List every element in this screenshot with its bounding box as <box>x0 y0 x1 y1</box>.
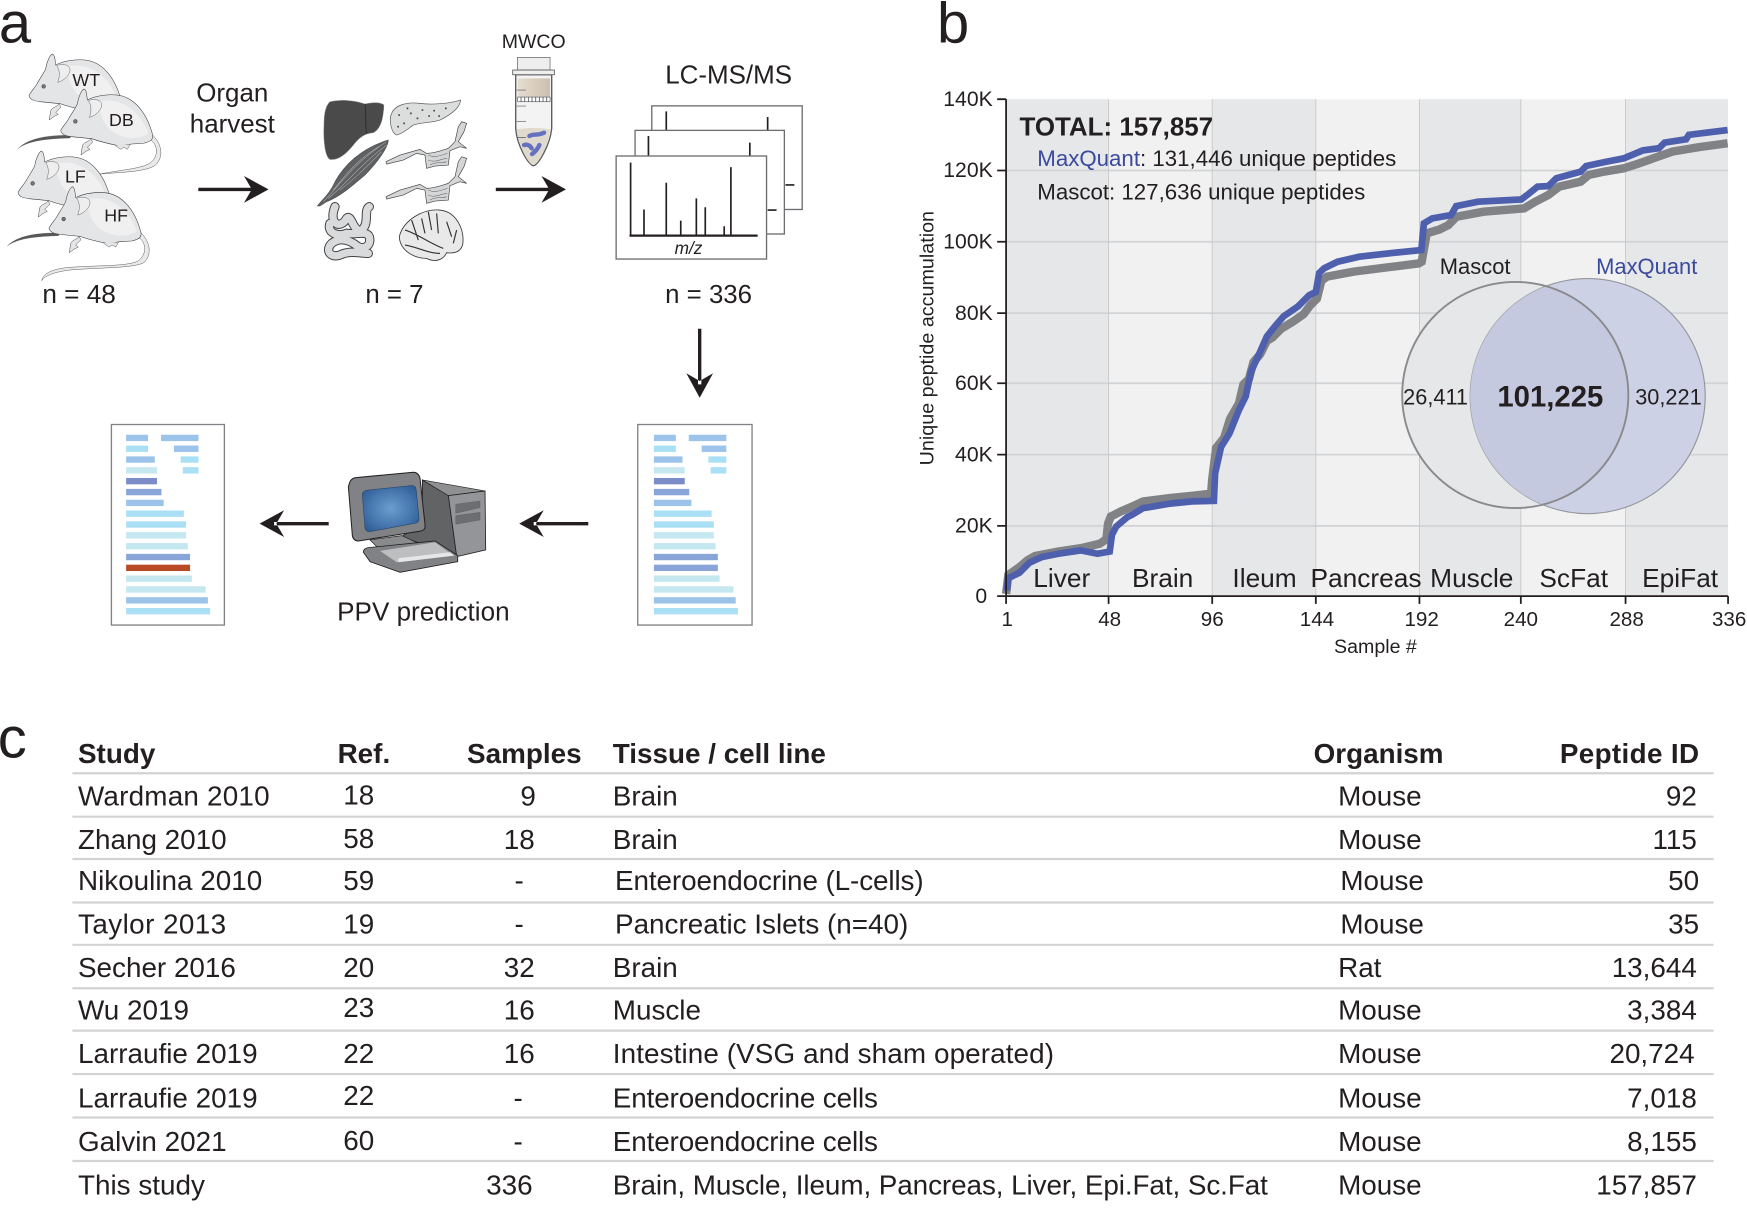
row: This study: 336 <box>486 1169 533 1200</box>
y-axis tick labels: 0 <box>975 585 987 608</box>
tissue labels: Ileum <box>1232 563 1297 593</box>
row: Taylor 2013: 35 <box>1668 909 1699 940</box>
icon: WT mouse <box>29 54 121 120</box>
icons: organs <box>317 100 467 260</box>
row: Wardman 2010 <box>78 779 1697 812</box>
venn diagram: MaxQuant <box>1596 254 1697 279</box>
icon: WT mouse: WT <box>72 70 100 90</box>
tissue labels: EpiFat <box>1642 563 1719 593</box>
row: Galvin 2021: Mouse <box>1338 1126 1422 1157</box>
row: Zhang 2010: Zhang 2010 <box>78 824 227 855</box>
row: Larraufie 2019 intestine: 20,724 <box>1609 1038 1695 1069</box>
tissue background bands <box>1006 99 1728 596</box>
text: Organ harvest: harvest <box>190 111 276 139</box>
row: Secher 2016: Secher 2016 <box>78 952 236 983</box>
row: Secher 2016: Rat <box>1338 952 1382 983</box>
x-axis title: Sample # <box>1334 636 1417 658</box>
panel b: cumulative peptide chart <box>917 88 1746 658</box>
row: Zhang 2010 <box>78 823 1697 855</box>
table rules <box>72 773 1714 1161</box>
y-axis tick labels: 120K <box>943 159 993 182</box>
y-axis title: Unique peptide accumulation <box>917 211 939 465</box>
icon: LF mouse: LF <box>65 167 86 187</box>
row: Wardman 2010: 18 <box>343 779 374 810</box>
row: Nikoulina 2010: Mouse <box>1340 865 1424 896</box>
row: Zhang 2010: Mouse <box>1338 824 1422 855</box>
y-axis tick labels: 60K <box>955 372 993 395</box>
row: Galvin 2021: Enteroendocrine cells <box>613 1126 878 1157</box>
curve: MaxQuant <box>1007 130 1728 591</box>
row: Larraufie 2019 enteroendocrine: Larraufie 2019 <box>78 1082 258 1113</box>
x-axis tick labels <box>1001 608 1746 631</box>
row: Wardman 2010: Mouse <box>1338 781 1422 812</box>
panel a: workflow <box>7 31 802 627</box>
y-axis tick labels: 100K <box>943 230 993 253</box>
y-axis tick labels: 140K <box>943 88 993 111</box>
y-axis tick labels: 40K <box>955 443 993 466</box>
icon: mass spectra <box>616 106 802 259</box>
arrow: to computer <box>519 510 588 537</box>
x-axis tick labels: 96 <box>1201 608 1224 631</box>
row: Wardman 2010: Brain <box>613 781 678 812</box>
row: This study: This study <box>78 1169 205 1200</box>
row: Taylor 2013: Pancreatic Islets (n=40) <box>615 909 908 940</box>
venn diagram: 101,225 <box>1497 381 1603 414</box>
row: Wu 2019: 16 <box>504 994 535 1025</box>
venn diagram: 30,221 <box>1635 384 1702 409</box>
venn diagram <box>1402 254 1705 514</box>
icon: MWCO tube <box>513 57 554 166</box>
row: Galvin 2021: - <box>513 1126 523 1157</box>
row: Larraufie 2019 intestine: Larraufie 2019 <box>78 1038 258 1069</box>
row: Wu 2019: Muscle <box>613 994 701 1025</box>
table header: Peptide ID <box>1560 738 1699 769</box>
tissue labels: Pancreas <box>1310 563 1421 593</box>
row: Zhang 2010: Brain <box>613 824 678 855</box>
curve: Mascot <box>1006 143 1728 594</box>
tissue labels: Brain <box>1132 563 1193 593</box>
row: Larraufie 2019 intestine: 22 <box>343 1038 374 1069</box>
icon: mass spectra: m/z <box>675 238 703 258</box>
table header: Study <box>78 738 156 769</box>
row: Wu 2019: Mouse <box>1338 994 1422 1025</box>
row: Larraufie 2019 enteroendocrine: 22 <box>343 1080 374 1111</box>
x-axis tick labels: 1 <box>1001 608 1013 631</box>
totals text: Mascot: 127,636 unique peptides <box>1037 179 1365 204</box>
x-axis tick labels: 192 <box>1404 608 1439 631</box>
totals text: TOTAL: 157,857 <box>1019 113 1213 141</box>
row: Larraufie 2019 enteroendocrine: - <box>513 1082 523 1113</box>
row: Galvin 2021: 60 <box>343 1125 374 1156</box>
tissue labels: Muscle <box>1430 563 1513 593</box>
row: Wardman 2010: 92 <box>1666 781 1697 812</box>
tissue labels: Liver <box>1033 563 1091 593</box>
text: n = 336: n = 336 <box>665 281 752 309</box>
row: This study: 157,857 <box>1596 1169 1697 1200</box>
row: Taylor 2013: Mouse <box>1340 909 1424 940</box>
row: Taylor 2013: 19 <box>343 909 374 940</box>
x-axis tick labels: 48 <box>1098 608 1121 631</box>
row: Wardman 2010: Wardman 2010 <box>78 781 270 812</box>
row: Wu 2019 <box>78 992 1697 1025</box>
row: Larraufie 2019 intestine <box>78 1038 1695 1069</box>
row: Nikoulina 2010: 59 <box>343 865 374 896</box>
row: Taylor 2013: - <box>515 909 524 940</box>
icon: HF mouse: HF <box>104 206 128 226</box>
row: Nikoulina 2010: Nikoulina 2010 <box>78 865 262 896</box>
row: Larraufie 2019 enteroendocrine: Enteroendocrine cells <box>613 1082 878 1113</box>
row: Wu 2019: 23 <box>343 992 374 1023</box>
text: n = 48: n = 48 <box>42 279 116 309</box>
arrow: to organs <box>198 176 269 203</box>
text: LC-MS/MS: LC-MS/MS <box>665 62 792 90</box>
row: Secher 2016 <box>78 952 1697 983</box>
row: Larraufie 2019 intestine: Intestine (VSG and sham operated) <box>613 1038 1054 1069</box>
row: Nikoulina 2010: - <box>515 865 524 896</box>
row: Galvin 2021: 8,155 <box>1627 1126 1697 1157</box>
row: Larraufie 2019 enteroendocrine: Mouse <box>1338 1082 1422 1113</box>
text: Organ harvest: Organ <box>196 79 268 107</box>
arrow: to LC-MS <box>496 176 566 203</box>
row: Nikoulina 2010: 50 <box>1668 865 1699 896</box>
icon: LF mouse <box>18 151 110 217</box>
table header: Tissue / cell line <box>613 738 826 769</box>
y-axis tick labels: 80K <box>955 302 993 325</box>
text: MWCO: MWCO <box>502 31 566 53</box>
row: Galvin 2021 <box>78 1125 1697 1157</box>
table header: Organism <box>1314 738 1444 769</box>
y-axis tick labels <box>943 88 993 608</box>
text: Organ harvest <box>190 79 276 139</box>
row: This study: Mouse <box>1338 1169 1422 1200</box>
icon: computer <box>348 472 486 572</box>
row: Galvin 2021: Galvin 2021 <box>78 1126 227 1157</box>
arrow: down <box>686 329 713 398</box>
text: PPV prediction: PPV prediction <box>337 597 510 627</box>
row: Zhang 2010: 115 <box>1652 824 1697 855</box>
axes <box>997 99 1728 604</box>
arrow: to predicted list <box>260 510 329 537</box>
row: Larraufie 2019 intestine: 16 <box>504 1038 535 1069</box>
x-axis tick labels: 336 <box>1712 608 1746 631</box>
row: This study <box>78 1169 1697 1200</box>
row: Larraufie 2019 enteroendocrine <box>78 1080 1697 1113</box>
row: Zhang 2010: 18 <box>504 824 535 855</box>
table header: Ref. <box>338 738 390 769</box>
row: Nikoulina 2010 <box>78 865 1699 896</box>
x-axis tick labels: 240 <box>1504 608 1538 631</box>
table header <box>78 738 1699 769</box>
text: n = 7: n = 7 <box>365 281 423 309</box>
icon: DB mouse: DB <box>109 110 134 130</box>
venn diagram: 26,411 <box>1403 384 1468 409</box>
x-axis tick labels: 288 <box>1609 608 1644 631</box>
row: Secher 2016: Brain <box>613 952 678 983</box>
row: Larraufie 2019 enteroendocrine: 7,018 <box>1627 1082 1697 1113</box>
panel c: studies table <box>72 738 1714 1200</box>
tissue labels <box>1033 563 1719 593</box>
totals text: MaxQuant: 131,446 unique peptides <box>1037 146 1396 171</box>
row: Taylor 2013: Taylor 2013 <box>78 909 226 940</box>
row: Zhang 2010: 58 <box>343 823 374 854</box>
y-axis tick labels: 20K <box>955 515 993 538</box>
row: Wardman 2010: 9 <box>520 781 536 812</box>
row: Larraufie 2019 intestine: Mouse <box>1338 1038 1422 1069</box>
icon: DB mouse <box>18 89 161 174</box>
icon: HF mouse <box>7 187 149 281</box>
row: Wu 2019: Wu 2019 <box>78 994 189 1025</box>
x-axis tick labels: 144 <box>1300 608 1334 631</box>
row: Wu 2019: 3,384 <box>1627 994 1697 1025</box>
row: Secher 2016: 32 <box>504 952 535 983</box>
row: Taylor 2013 <box>78 909 1699 940</box>
peptide list: right document <box>638 425 752 625</box>
row: Nikoulina 2010: Enteroendocrine (L-cells) <box>615 865 924 896</box>
table header: Samples <box>467 738 582 769</box>
venn diagram: Mascot <box>1440 254 1511 279</box>
peptide list: left document <box>111 425 224 625</box>
row: Secher 2016: 20 <box>343 952 374 983</box>
tissue labels: ScFat <box>1539 563 1609 593</box>
row: This study: Brain, Muscle, Ileum, Pancreas, Liver, Epi.Fat, Sc.Fat <box>613 1169 1268 1200</box>
totals text <box>1019 113 1396 204</box>
row: Secher 2016: 13,644 <box>1612 952 1697 983</box>
